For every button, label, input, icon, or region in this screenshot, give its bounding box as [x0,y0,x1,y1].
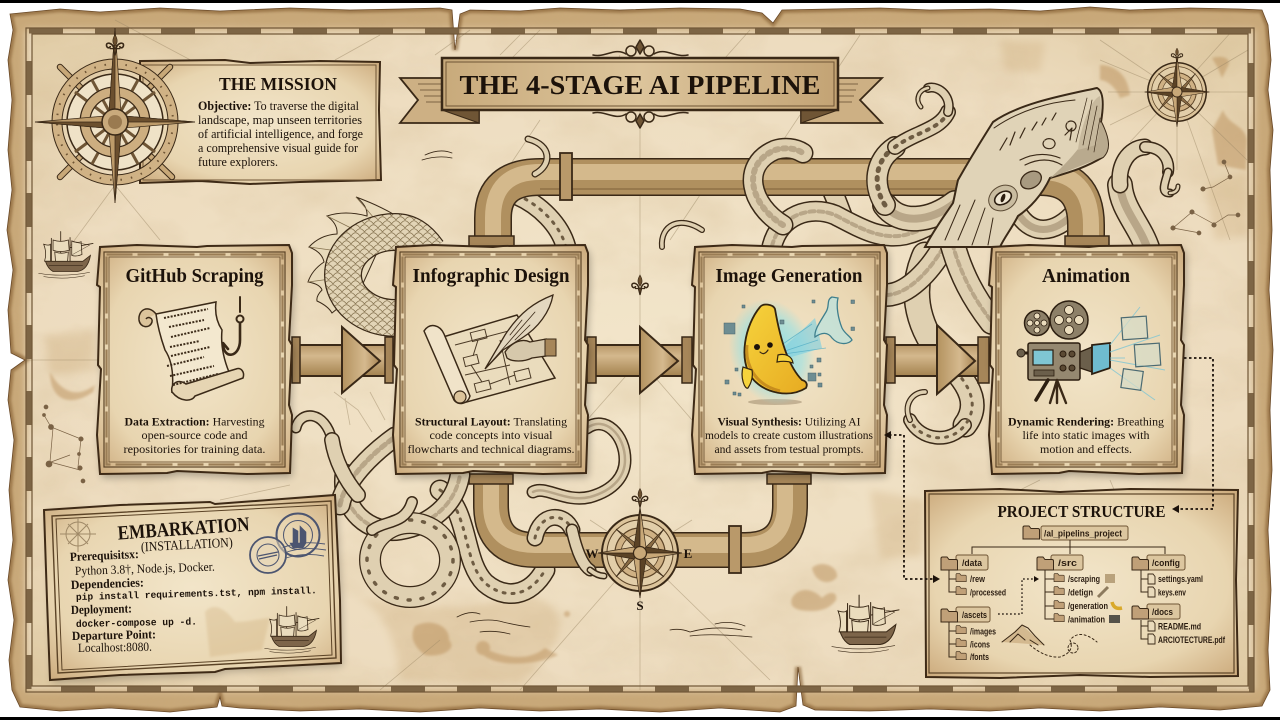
mission objective text: a comprehensive visual guide for [198,141,358,155]
folder /data: /data [962,558,983,569]
stage 4 description [1008,414,1164,456]
panel: stage 3 Image Generation [692,245,889,478]
kraken: head and mantle [925,88,1108,247]
/assets children: /fonts [970,652,989,663]
stage 3 heading: Image Generation [716,265,862,287]
tree connector lines [949,540,1165,657]
dotted arrow: animation to project structure [1172,358,1213,513]
/src children: /scraping [1068,574,1100,585]
stage 4 heading: Animation [1042,265,1130,287]
stage 3 description: models to create custom illustrations [705,428,873,442]
/config files [1148,574,1203,598]
/src children: /generation [1068,601,1108,612]
subheading: installation: (INSTALLATION) [140,535,233,554]
icon: small ship left [39,232,93,278]
/docs files: ARCIOTECTURE.pdf [1158,635,1226,646]
/src children: /animation [1068,614,1105,626]
fleur-de-lis at map centre [632,275,648,295]
heading: project structure: PROJECT STRUCTURE [998,502,1166,521]
/data children: /rew [970,574,985,585]
/assets children: /icons [970,640,990,650]
arrow: stage 1 to 2 [292,327,393,393]
stage 1 description: repositories for training data. [124,442,266,456]
/data children [956,574,1006,598]
/src children: /detign [1068,588,1093,598]
panel: embarkation installation [44,495,343,683]
compass letter W: W [586,546,598,561]
folder /assets: /ascets [962,610,987,621]
folder /docs: /docs [1152,607,1173,618]
kraken: arms [753,88,1178,438]
/docs files: README.md [1158,622,1201,632]
/config files: settings.yaml [1158,574,1203,585]
icon: fish hook [223,297,244,355]
dotted arrow: image generation to data folder [884,431,940,583]
installation details: Localhost:8080. [78,640,152,655]
heading: the mission: THE MISSION [219,74,337,94]
/assets children: /images [970,626,996,638]
stage 4 description: Dynamic Rendering: Breathing [1008,414,1164,428]
icon: ship in panel [265,607,319,653]
panel: the mission [140,60,381,184]
icon: ship lower [832,595,899,653]
stage 2 description: Structural Layout: Translating [415,414,567,428]
/data children: /processed [970,588,1006,598]
folder /assets [941,607,990,622]
sketch compass [60,518,96,552]
installation details: Python 3.8†, Node.js, Docker. [75,560,215,578]
title: THE 4-STAGE AI PIPELINE [460,70,820,100]
folder /config: /config [1152,558,1180,569]
installation details: Prerequisitsx: [70,547,139,564]
installation details: Departure Point: [72,627,156,643]
folder /src: /src [1058,558,1077,569]
root folder [1023,526,1128,540]
stage 2 heading: Infographic Design [412,265,570,287]
/docs files [1148,621,1226,646]
stage 2 description: flowcharts and technical diagrams. [408,442,575,456]
heading: embarkation: EMBARKATION [117,513,251,545]
mission objective text: future explorers. [198,155,278,169]
icon: blueprint and quill [424,295,556,403]
panel: stage 2 Infographic Design [393,245,590,478]
pipe: top connector [469,153,1109,246]
stage 3 description: and assets from testual prompts. [714,442,864,456]
folder /docs [1132,604,1180,619]
tentacles behind pipes [440,175,1075,594]
constellation left [42,405,85,483]
mission objective text: landscape, map unseen territories [198,113,362,127]
pipe: bottom connector [469,474,811,573]
compass rose top right [1145,48,1209,127]
icon: code scroll [139,302,244,400]
folder /config [1132,555,1185,570]
installation details: Deployment: [71,601,132,617]
ornament below title [593,112,688,128]
compass rose on lower pipe [586,488,692,613]
stain [205,607,270,657]
stage 2 description [408,414,575,456]
stage 2 description: code concepts into visual [430,428,553,442]
stage 3 description: Visual Synthesis: Utilizing AI [718,414,861,428]
stage 1 description: open-source code and [142,428,248,442]
stage 3 description [705,414,873,456]
/config files: keys.env [1158,588,1186,598]
arrow: stage 3 to 4 [886,325,989,394]
constellation right [1171,160,1240,235]
stage 1 description [124,414,266,456]
ornament above title [593,40,688,56]
installation details: pip install requirements.tst, npm install. [76,585,317,603]
/assets children [956,626,996,663]
lower-left tentacles [296,392,625,600]
dotted connector inside structure [998,576,1039,614]
panel: stage 4 Animation [989,245,1186,478]
icon: film camera [1017,301,1165,403]
root folder: /al_pipelins_project [1044,528,1123,540]
installation details: Dependencies: [71,575,144,592]
mission objective text [198,99,363,169]
icon: sketch mountains and treasure trail [1002,625,1097,657]
stage 1 description: Data Extraction: Harvesting [124,414,265,428]
compass letter E: E [684,546,692,561]
tentacles in front of pipes [528,139,702,576]
folder /data [941,555,988,570]
/src children [1054,574,1122,626]
arrow: stage 2 to 3 [587,327,692,393]
stage 4 description: life into static images with [1022,428,1150,442]
icon: ship wheel compass [35,28,195,203]
compass letter S: S [636,598,644,613]
panel: project structure [925,489,1238,678]
icon: banana with ai beam [715,288,854,416]
panel: stage 1 GitHub Scraping [97,245,294,478]
stage 4 description: motion and effects. [1040,442,1132,456]
folder /src [1037,555,1083,570]
installation details [70,547,317,655]
postal stamps [250,514,326,573]
decorative wave marks [422,151,752,637]
stage 1 heading: GitHub Scraping [126,265,264,287]
title banner ribbon [400,58,882,123]
mission objective text: Objective: To traverse the digital [198,99,360,113]
serpent with scales [308,197,428,318]
installation details: docker-compose up -d. [76,616,197,631]
mission objective text: of artificial intelligence, and forge [198,127,363,141]
